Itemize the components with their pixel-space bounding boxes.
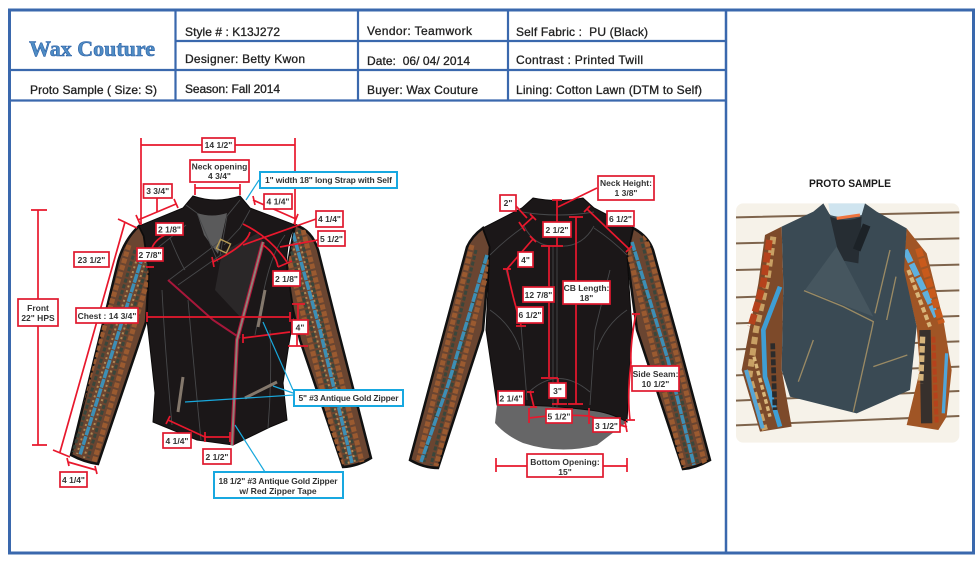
label: 14 1/2 bbox=[202, 138, 235, 152]
left front sleeve bbox=[67, 226, 153, 464]
label: CB length: 18" bbox=[580, 293, 593, 303]
label: chest: Chest : 14 3/4" bbox=[78, 311, 136, 321]
label: 2 1/8 right bbox=[273, 271, 300, 286]
date: Date: 06/ 04/ 2014 bbox=[367, 54, 470, 68]
label: 4 bbox=[292, 320, 308, 334]
callout: strap bbox=[260, 172, 397, 188]
label: 2 1/2 hem bbox=[203, 449, 231, 464]
season: Season: Fall 2014 bbox=[185, 82, 280, 96]
label: 12 7/8: 12 7/8" bbox=[525, 290, 552, 300]
label: side seam: 10 1/2" bbox=[642, 379, 669, 389]
pocket zippers bbox=[178, 290, 277, 412]
label: 4 1/4 neck drop: 4 1/4" bbox=[318, 214, 341, 224]
label: 5 1/2: 5 1/2" bbox=[320, 234, 343, 244]
photo jacket neck bbox=[830, 217, 862, 263]
photo jacket lapel bbox=[805, 247, 873, 317]
label: 4 1/4 cuff bbox=[60, 472, 87, 487]
hanger and tag bbox=[828, 203, 865, 223]
label: neck opening: 4 3/4" bbox=[208, 171, 231, 181]
label: CB length bbox=[563, 281, 610, 304]
measurement lines, back bbox=[496, 188, 640, 472]
label: neck opening: Neck opening bbox=[192, 162, 247, 172]
label: front length: 22" HPS bbox=[21, 313, 55, 323]
label: side seam: Side Seam: bbox=[633, 369, 679, 379]
label: 23 1/2: 23 1/2" bbox=[78, 255, 105, 265]
proto sample size: Proto Sample ( Size: S) bbox=[30, 83, 157, 97]
label: 2 7/8: 2 7/8" bbox=[139, 250, 161, 260]
label: bottom opening: 15" bbox=[558, 467, 572, 477]
label: 3 1/2: 3 1/2" bbox=[595, 421, 618, 431]
label: bottom opening bbox=[527, 454, 603, 477]
contrast: Contrast : Printed Twill bbox=[516, 53, 643, 67]
back jacket body bbox=[483, 198, 633, 422]
left back sleeve bbox=[410, 228, 490, 468]
label: 14 1/2: 14 1/2" bbox=[205, 140, 232, 150]
designer: Designer: Betty Kwon bbox=[185, 52, 305, 66]
label: 5 1/2 bbox=[318, 231, 345, 246]
label: neck height: Neck Height: bbox=[600, 178, 652, 188]
label: front length bbox=[18, 299, 58, 326]
lapel zipper bbox=[168, 280, 240, 338]
label: 4: 4" bbox=[296, 322, 304, 332]
label: 5 1/2 back bbox=[546, 409, 572, 423]
buyer: Buyer: Wax Couture bbox=[367, 83, 478, 97]
label: 2 1/8 right: 2 1/8" bbox=[275, 274, 298, 284]
label: CB length: CB Length: bbox=[564, 283, 610, 293]
label: neck height: 1 3/8" bbox=[615, 188, 637, 198]
label: 2 1/4: 2 1/4" bbox=[500, 394, 522, 404]
photo left sleeve bbox=[742, 227, 792, 432]
label: 4 1/4 cuff: 4 1/4" bbox=[62, 475, 85, 485]
label: 3: 3" bbox=[553, 386, 562, 396]
label: 3 1/2 bbox=[593, 418, 620, 432]
seams bbox=[155, 200, 285, 440]
right back sleeve bbox=[627, 228, 710, 469]
label: bottom opening: Bottom Opening: bbox=[530, 457, 600, 467]
style number: Style # : K13J272 bbox=[185, 25, 280, 39]
label: 2 bbox=[500, 195, 516, 211]
proto sample heading: PROTO SAMPLE bbox=[809, 178, 891, 190]
neck lining bbox=[197, 213, 227, 254]
label: 23 1/2 bbox=[74, 252, 109, 267]
label: 2 7/8 bbox=[137, 248, 163, 261]
label: neck opening bbox=[190, 160, 249, 182]
grey lining bbox=[495, 405, 627, 450]
back jacket illustration bbox=[410, 198, 710, 469]
front jacket body bbox=[139, 196, 295, 445]
logo: Wax Couture: Wax Couture bbox=[29, 36, 155, 61]
label: 2 1/4 bbox=[498, 391, 524, 405]
label: 3 bbox=[549, 383, 566, 398]
label: front length: Front bbox=[27, 303, 49, 313]
label: 2: 2" bbox=[504, 198, 512, 208]
label: 3 3/4 bbox=[144, 184, 172, 198]
label: 4 back bbox=[518, 252, 533, 267]
label: 4 1/4 neck drop bbox=[316, 211, 343, 227]
back seams bbox=[490, 212, 627, 408]
label: 4 1/4 hem bbox=[163, 433, 191, 448]
label: 2 1/8 left: 2 1/8" bbox=[158, 224, 181, 234]
label: 4 1/4 shoulder: 4 1/4" bbox=[267, 196, 289, 206]
label: 2 1/2 hem: 2 1/2" bbox=[206, 452, 228, 462]
callout: 5 inch zipper: 5" #3 Antique Gold Zipper bbox=[298, 393, 399, 403]
label: 5 1/2 back: 5 1/2" bbox=[548, 412, 570, 422]
photo right sleeve bbox=[903, 228, 952, 430]
quilted panel bbox=[215, 233, 264, 320]
callout: 5 inch zipper bbox=[294, 390, 403, 406]
label: 6 1/2 shoulder: 6 1/2" bbox=[609, 214, 632, 224]
buckle bbox=[216, 239, 231, 253]
main zipper bbox=[232, 242, 263, 445]
label: 12 7/8 bbox=[523, 287, 554, 302]
label: 2 1/2 back bbox=[543, 222, 571, 237]
blue callout leader lines bbox=[185, 180, 294, 472]
label: 3 3/4: 3 3/4" bbox=[146, 186, 169, 196]
callout: strap: 1" width 18" long Strap with Self bbox=[265, 175, 392, 185]
front jacket illustration bbox=[67, 196, 371, 467]
label: 4 back: 4" bbox=[521, 255, 530, 265]
strap and buckle bbox=[857, 225, 867, 250]
lining: Lining: Cotton Lawn (DTM to Self) bbox=[516, 83, 702, 97]
label: chest bbox=[76, 308, 138, 323]
photo jacket body bbox=[782, 203, 917, 413]
label: 4 1/4 hem: 4 1/4" bbox=[166, 436, 188, 446]
label: 6 1/2 back: 6 1/2" bbox=[519, 310, 541, 320]
callout: main zipper bbox=[214, 472, 343, 498]
measurement lines, front bbox=[31, 138, 318, 474]
proto sample photo bbox=[736, 203, 959, 443]
photo zippers bbox=[798, 250, 907, 412]
label: 6 1/2 shoulder bbox=[607, 211, 634, 226]
wall with slats bbox=[736, 203, 959, 443]
label: 4 1/4 shoulder bbox=[264, 194, 292, 209]
right front sleeve bbox=[283, 225, 371, 467]
self fabric: Self Fabric : PU (Black) bbox=[516, 25, 648, 39]
callout: main zipper: 18 1/2" #3 Antique Gold Zipper bbox=[218, 476, 338, 486]
label: neck height bbox=[598, 176, 654, 200]
label: 2 1/2 back: 2 1/2" bbox=[546, 225, 568, 235]
label: side seam bbox=[632, 366, 679, 391]
label: 6 1/2 back bbox=[517, 307, 543, 323]
tag bbox=[837, 215, 860, 218]
header table bbox=[10, 10, 726, 100]
callout: main zipper: w/ Red Zipper Tape bbox=[238, 486, 317, 496]
vendor: Vendor: Teamwork bbox=[367, 24, 473, 38]
